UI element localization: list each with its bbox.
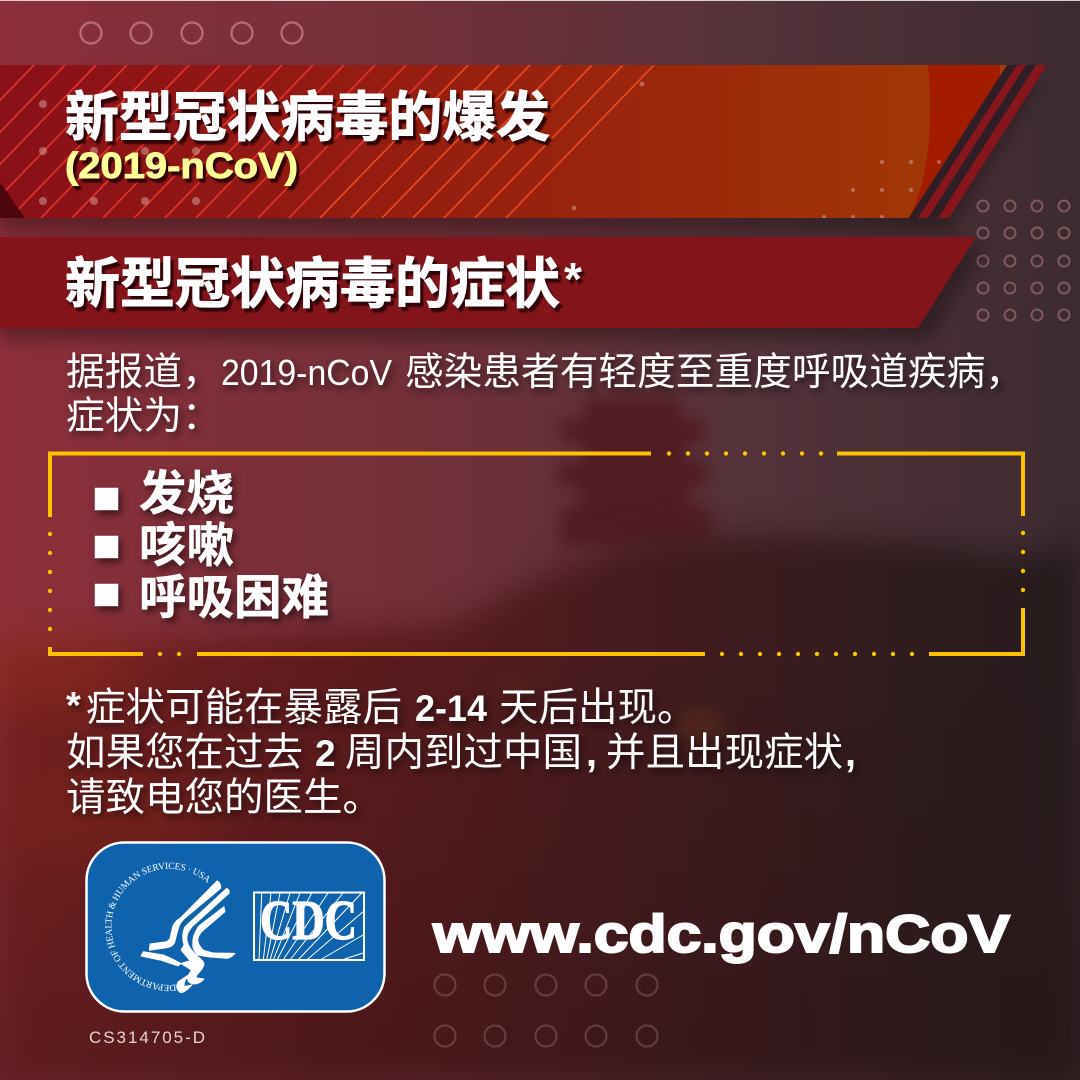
symptom: fever: 发烧 xyxy=(139,468,234,521)
intro text: 感染患者有轻度至重度呼吸道疾病， xyxy=(405,351,1024,394)
intro text: 症状为： xyxy=(66,395,221,438)
footnote text: 请致电您的医生。 xyxy=(66,776,382,820)
footnote text: , xyxy=(845,731,856,775)
panel: title banner xyxy=(0,65,1040,232)
banner stripes xyxy=(909,65,1047,218)
heading: symptoms: 新型冠状病毒的症状 xyxy=(65,253,560,315)
right decorative circles xyxy=(978,200,1070,320)
publication code: CS314705-D xyxy=(89,1028,205,1047)
symptom: cough: 咳嗽 xyxy=(139,520,234,573)
bottom decorative circles xyxy=(434,974,658,1046)
icon: HHS eagle xyxy=(141,881,235,993)
panel: symptoms heading banner xyxy=(0,237,985,340)
footnote text: 并且出现症状 xyxy=(606,731,843,775)
footnote text: 周内到过中国 xyxy=(345,731,582,775)
symptom list xyxy=(95,468,329,625)
heading: symptoms: * xyxy=(564,253,582,305)
footnote text: 症状可能在暴露后 xyxy=(86,686,402,730)
footnote text: 2-14 xyxy=(415,688,487,729)
footnote text: 天后出现。 xyxy=(499,686,696,730)
HHS circular text: DEPARTMENT OF HEALTH & HUMAN SERVICES · USA xyxy=(105,862,210,992)
footnote text: , xyxy=(586,731,597,775)
footnote text: 2 xyxy=(315,733,336,774)
title: 新型冠状病毒的爆发 xyxy=(65,88,550,148)
CDC logo box: CDC xyxy=(260,890,357,952)
symptom: fever xyxy=(95,468,234,521)
logo: HHS and CDC xyxy=(85,841,386,1013)
intro text: 2019-nCoV xyxy=(221,352,392,393)
symptom: cough xyxy=(95,520,234,573)
intro text xyxy=(66,351,1024,438)
top decorative circles xyxy=(80,22,302,44)
symptom: difficulty breathing: 呼吸困难 xyxy=(139,572,329,625)
footnote text xyxy=(66,685,856,820)
website url: www.cdc.gov/nCoV xyxy=(432,905,1010,964)
symptom frame xyxy=(48,451,1025,656)
footnote text: * xyxy=(66,685,81,727)
subtitle: (2019-nCoV) xyxy=(65,145,298,186)
footnote text: 如果您在过去 xyxy=(66,731,303,775)
intro text: 据报道， xyxy=(66,351,221,394)
